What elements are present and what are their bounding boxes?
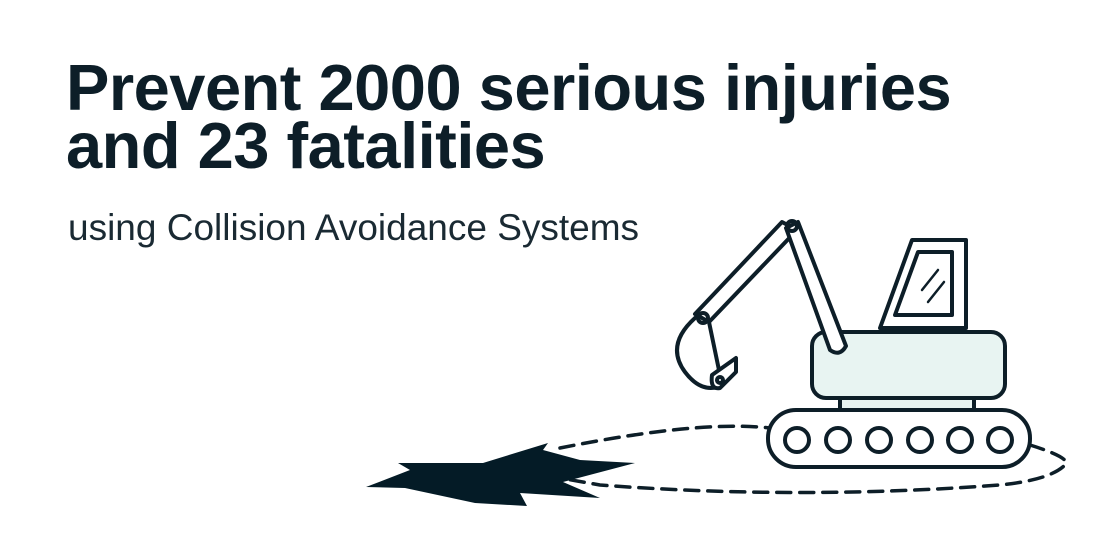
- excavator: [677, 221, 1030, 467]
- title: and 23 fatalities: [66, 109, 545, 182]
- icon: collision splat: [366, 443, 635, 506]
- subtitle: using Collision Avoidance Systems: [68, 207, 639, 248]
- title: Prevent 2000 serious injuries: [66, 51, 951, 124]
- title: [66, 51, 951, 182]
- dashed ellipse: avoidance zone: [560, 426, 1066, 492]
